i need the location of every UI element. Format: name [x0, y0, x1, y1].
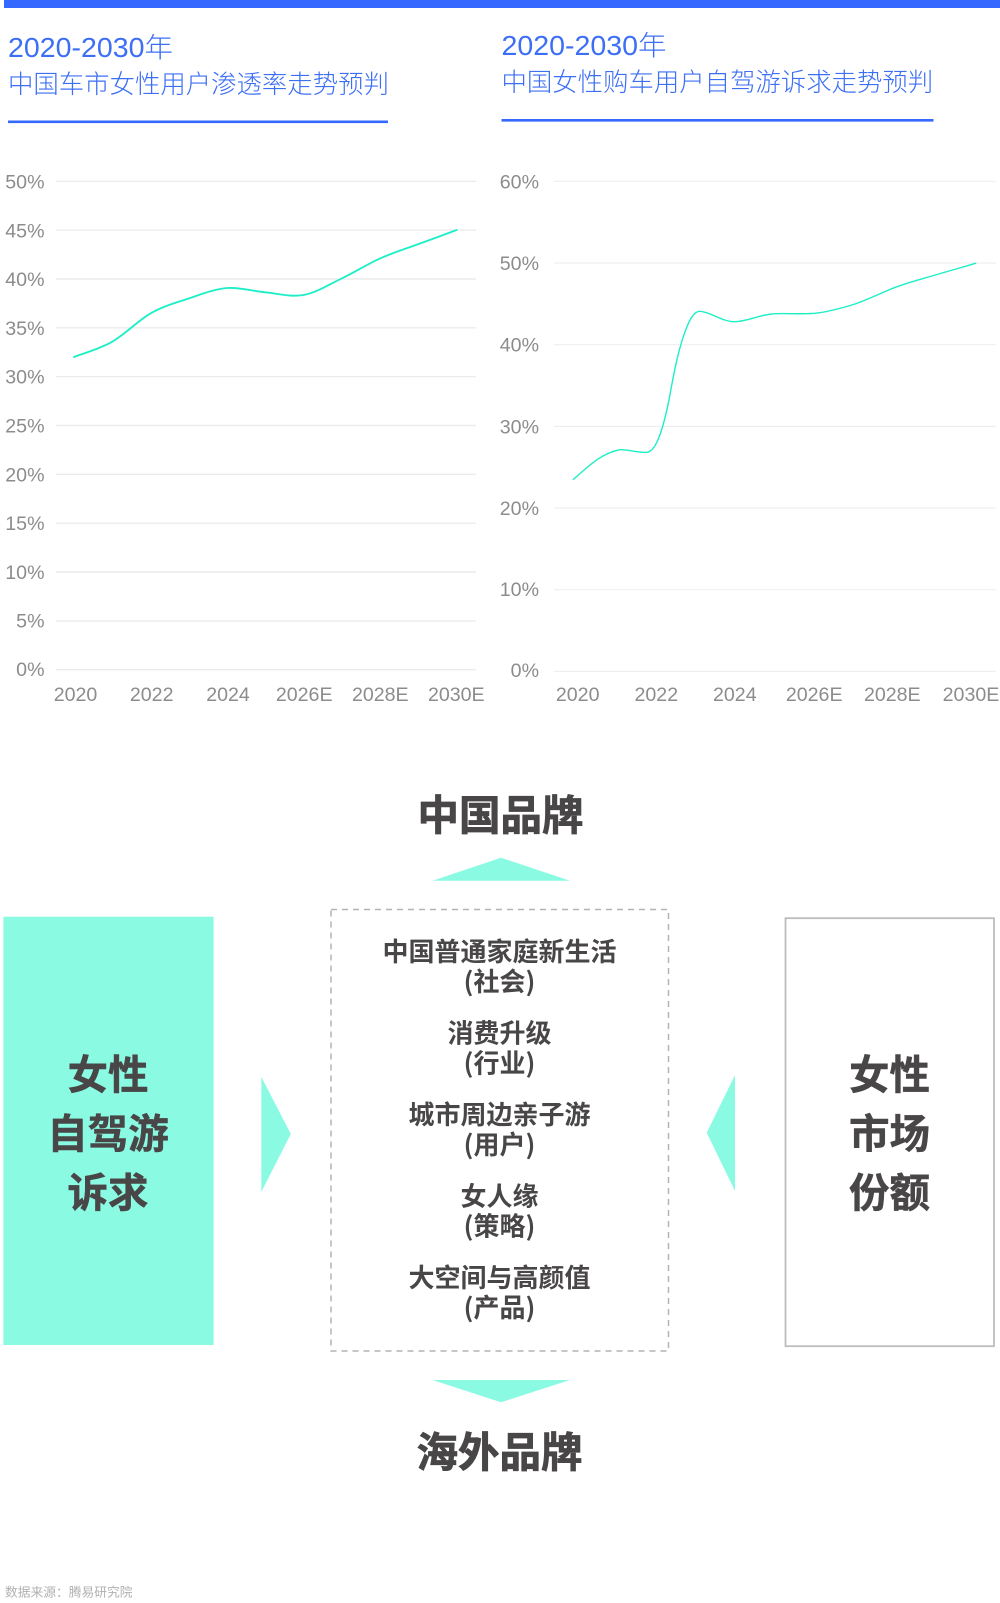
left chart y axis labels: 45% — [5, 220, 44, 242]
right chart x axis labels: 2026E — [786, 684, 843, 706]
heading: left chart title — [8, 32, 389, 123]
factor: users: 城市周边亲子游 — [408, 1095, 591, 1132]
factor: strategy — [460, 1176, 539, 1244]
left chart y axis labels: 15% — [5, 513, 44, 535]
heading: left chart title: 2020-2030年 — [8, 32, 173, 63]
factor: industry: (行业) — [464, 1044, 535, 1080]
top accent bar — [4, 0, 1000, 8]
factor: users: (用户) — [464, 1125, 535, 1162]
heading: left chart title: 中国车市女性用户渗透率走势预判 — [8, 71, 389, 99]
arrow: right — [261, 1077, 291, 1192]
left chart y axis labels: 50% — [5, 172, 44, 194]
left chart x axis labels: 2020 — [54, 684, 97, 706]
right chart y axis labels — [500, 172, 539, 682]
factor: strategy: (策略) — [464, 1206, 535, 1244]
panel: female self-driving demand: 女性 — [68, 1042, 148, 1101]
heading: right chart title — [502, 30, 934, 122]
factor: product: 大空间与高颜值 — [408, 1258, 591, 1295]
panel: female self-driving demand: 诉求 — [68, 1160, 148, 1219]
arrow: up — [432, 858, 570, 881]
right chart y axis labels: 40% — [500, 335, 539, 357]
heading: right chart title: 中国女性购车用户自驾游诉求走势预判 — [502, 69, 933, 97]
right chart y axis labels: 0% — [511, 660, 539, 682]
left chart y axis labels: 25% — [5, 416, 44, 438]
factor: product — [408, 1258, 591, 1325]
left chart x axis labels: 2024 — [206, 684, 250, 706]
right chart x axis labels: 2022 — [635, 684, 678, 706]
left chart x axis labels: 2028E — [352, 684, 409, 706]
left chart y axis labels: 0% — [16, 659, 44, 681]
line: self-driving travel demand — [573, 263, 976, 479]
factor: society — [382, 932, 617, 999]
arrow: left — [707, 1075, 735, 1191]
arrow: down — [432, 1380, 570, 1402]
factor: product: (产品) — [464, 1288, 535, 1325]
left chart y axis labels: 10% — [5, 562, 44, 584]
left chart x axis labels: 2030E — [428, 684, 485, 706]
right chart y axis labels: 50% — [500, 253, 539, 275]
panel: center factors — [331, 910, 668, 1351]
factor: industry: 消费升级 — [447, 1014, 552, 1050]
right chart x axis labels: 2020 — [556, 684, 600, 706]
left chart x axis labels: 2022 — [130, 684, 173, 706]
heading: Chinese brands: 中国品牌 — [417, 782, 584, 842]
source note: 数据来源：腾易研究院 — [5, 1584, 133, 1600]
right chart x axis labels — [556, 684, 999, 706]
factor: society: 中国普通家庭新生活 — [382, 932, 617, 969]
panel: female market share — [786, 918, 994, 1346]
factor: industry — [447, 1014, 552, 1080]
right chart x axis labels: 2030E — [943, 684, 999, 706]
right chart x axis labels: 2024 — [713, 684, 757, 706]
left chart y axis labels: 40% — [5, 269, 44, 291]
factor: users — [408, 1095, 591, 1162]
right chart y axis labels: 30% — [500, 416, 539, 438]
factor: strategy: 女人缘 — [460, 1176, 539, 1214]
right chart y axis labels: 20% — [500, 498, 539, 520]
left chart y axis labels: 30% — [5, 367, 44, 389]
left chart y axis labels: 20% — [5, 464, 44, 486]
panel: female market share: 市场 — [849, 1101, 930, 1160]
line: female penetration rate — [74, 230, 457, 357]
panel: female market share: 女性 — [849, 1042, 930, 1101]
panel: female self-driving demand: 自驾游 — [47, 1101, 169, 1160]
panel: female market share: 份额 — [849, 1160, 930, 1219]
panel: female self-driving demand — [3, 917, 214, 1345]
left chart y axis labels — [5, 172, 44, 681]
right chart x axis labels: 2028E — [864, 684, 921, 706]
left chart x axis labels: 2026E — [276, 684, 333, 706]
panel: right chart — [500, 30, 999, 706]
factor: society: (社会) — [464, 962, 535, 999]
left chart y axis labels: 5% — [16, 611, 44, 633]
heading: overseas brands: 海外品牌 — [416, 1419, 583, 1479]
left chart x axis labels — [54, 684, 485, 706]
panel: left chart — [5, 32, 485, 706]
left chart y axis labels: 35% — [5, 318, 44, 340]
right chart y axis labels: 60% — [500, 172, 539, 194]
heading: right chart title: 2020-2030年 — [502, 30, 666, 61]
right chart y axis labels: 10% — [500, 579, 539, 601]
